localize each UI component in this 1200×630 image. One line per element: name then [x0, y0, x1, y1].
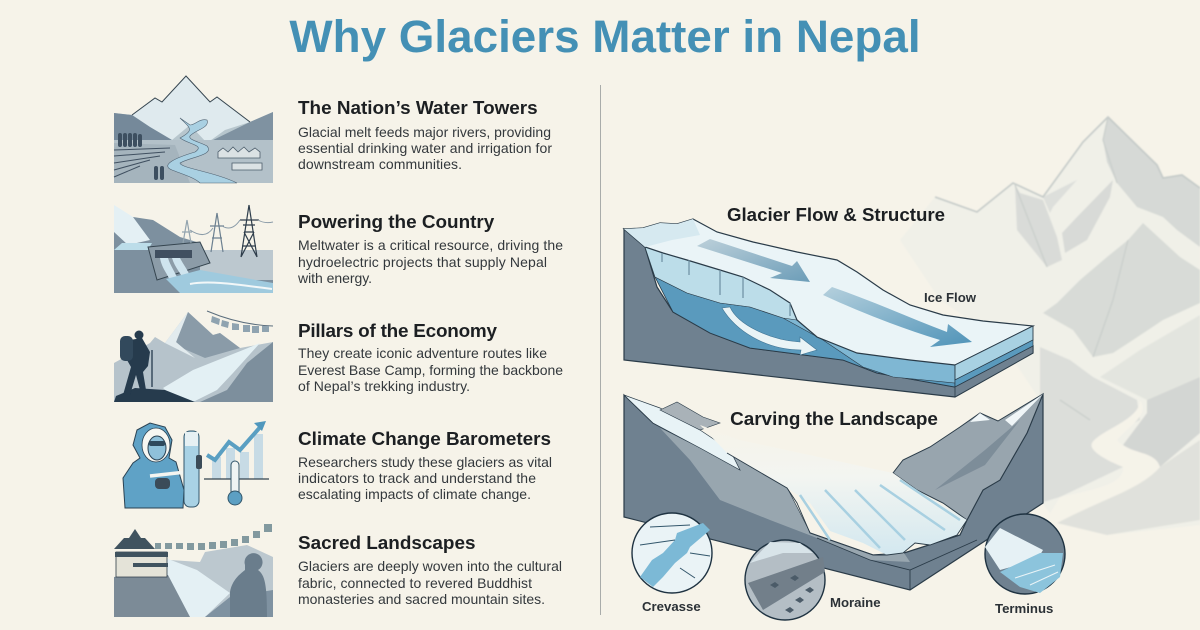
title: Why Glaciers Matter in Nepal — [289, 11, 921, 62]
diagram: carving the landscape — [624, 394, 1065, 620]
panel: climate — [123, 421, 552, 508]
panel: economy — [114, 311, 563, 402]
icon: dam and pylons — [114, 205, 273, 293]
inset: terminus — [985, 514, 1065, 616]
rock block — [624, 394, 1043, 590]
label: Ice Flow — [924, 290, 977, 305]
description: Meltwater is a critical resource, driving the — [298, 237, 563, 253]
description: Everest Base Camp, forming the backbone — [298, 362, 563, 378]
description: They create iconic adventure routes like — [298, 345, 547, 361]
icon: mountain valley with river — [114, 76, 273, 183]
heading: Sacred Landscapes — [298, 533, 475, 554]
icon: monastery and monk — [114, 524, 273, 617]
panel: water towers — [114, 76, 552, 183]
description: monasteries and sacred mountain sites. — [298, 591, 545, 607]
heading: Climate Change Barometers — [298, 429, 551, 450]
inset: terminus: Terminus — [995, 601, 1053, 616]
diagram: glacier flow and structure — [624, 204, 1033, 397]
heading: The Nation’s Water Towers — [298, 98, 538, 119]
inset: crevasse: Crevasse — [642, 599, 701, 614]
icon: researcher with ice core and chart — [123, 421, 269, 508]
valley slope — [660, 428, 910, 562]
description: indicators to track and understand the — [298, 470, 536, 486]
block front edge — [817, 538, 977, 590]
panel: powering the country — [114, 205, 563, 293]
description: essential drinking water and irrigation for — [298, 140, 552, 156]
description: Researchers study these glaciers as vital — [298, 454, 552, 470]
background mountains — [900, 117, 1200, 535]
ice ridge — [624, 395, 740, 470]
ice layers — [645, 247, 955, 387]
panel: sacred landscapes — [114, 524, 562, 617]
heading: Glacier Flow & Structure — [727, 204, 945, 225]
description: with energy. — [297, 270, 372, 286]
description: downstream communities. — [298, 156, 462, 172]
inset: crevasse — [632, 513, 712, 614]
rock block — [624, 229, 1033, 397]
description: Glaciers are deeply woven into the cultural — [298, 558, 562, 574]
heading: Powering the Country — [298, 212, 495, 233]
description: Glacial melt feeds major rivers, providing — [298, 124, 551, 140]
inset: moraine: Moraine — [830, 595, 881, 610]
description: hydroelectric projects that supply Nepal — [298, 254, 547, 270]
glacier tongue — [700, 425, 967, 555]
heading: Pillars of the Economy — [298, 321, 497, 342]
icon: trekker and mountains — [114, 311, 273, 402]
heading: Carving the Landscape — [730, 409, 938, 430]
inset: moraine — [745, 540, 881, 620]
mountain ridges — [660, 402, 720, 430]
description: escalating impacts of climate change. — [298, 486, 531, 502]
description: of Nepal’s trekking industry. — [298, 378, 470, 394]
column divider — [600, 85, 601, 615]
description: fabric, connected to revered Buddhist — [298, 575, 532, 591]
slab front edge — [955, 326, 1033, 380]
flow arrows — [697, 239, 810, 282]
glacier top surface — [624, 219, 1033, 365]
